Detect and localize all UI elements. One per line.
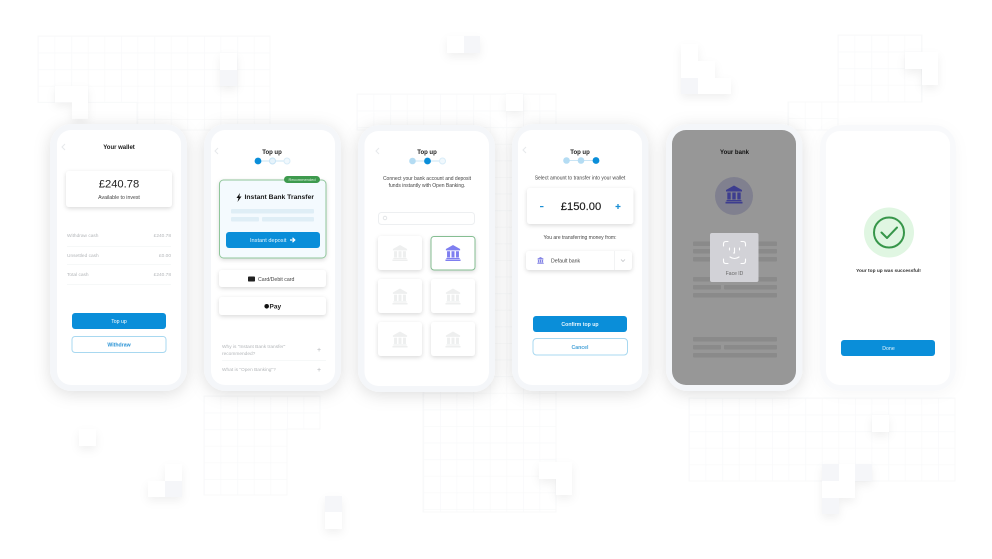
stepper — [255, 158, 290, 164]
bank tile 2 selected — [431, 236, 475, 270]
floating blocks: top left L — [55, 86, 88, 119]
floating blocks: top stairs — [681, 44, 731, 94]
plus control — [616, 204, 620, 209]
done button: Done — [882, 346, 895, 352]
phone screen — [211, 130, 335, 385]
face id icon — [724, 242, 746, 264]
phone frame — [204, 124, 341, 391]
floating block: lower right single — [872, 415, 889, 432]
lightning icon — [236, 193, 242, 202]
phone 6: success — [820, 125, 956, 391]
phone frame — [820, 125, 956, 391]
floating blocks: upper column — [220, 53, 237, 86]
success icon — [864, 208, 914, 258]
balance card — [66, 171, 172, 207]
source label: You are transferring money from: — [544, 235, 616, 241]
phone frame — [512, 124, 648, 391]
screen title: Your wallet — [103, 145, 135, 151]
intro text — [383, 176, 472, 189]
placeholder text bars — [693, 242, 777, 358]
background grid: below second phone — [204, 396, 320, 495]
balance amount: £240.78 — [99, 178, 139, 190]
floating blocks: lower right cluster — [822, 464, 872, 514]
phone screen — [826, 131, 950, 385]
withdraw button — [72, 336, 166, 352]
amount card — [527, 188, 634, 224]
screen title: Top up — [570, 150, 590, 156]
cash rows: £240.78 — [154, 233, 171, 239]
faq list: recommended? — [222, 351, 256, 357]
top up button — [72, 313, 166, 329]
faq list: What is "Open Banking"? — [222, 367, 276, 373]
cancel button — [533, 338, 628, 355]
apple pay option: Pay — [270, 304, 281, 310]
withdraw button: Withdraw — [107, 342, 132, 348]
screen title: Top up — [417, 150, 437, 156]
phone 3: select bank — [358, 125, 495, 392]
dimmed screen — [672, 130, 796, 385]
instant deposit button: Instant deposit — [250, 238, 287, 244]
phone screen — [518, 130, 642, 385]
phone 5: bank face id — [666, 124, 802, 391]
bank tile 5 — [378, 322, 422, 356]
phone 2: top up method — [204, 124, 341, 391]
placeholder text bars — [231, 209, 314, 222]
recommended badge: Recommended — [288, 177, 316, 182]
bank tile 1 — [378, 236, 422, 270]
confirm button: Confirm top up — [561, 322, 599, 328]
phone screen — [364, 131, 489, 386]
stepper — [409, 158, 446, 164]
instant bank transfer card — [220, 176, 326, 258]
bank tile 6 — [431, 322, 475, 356]
background grid: top left — [38, 36, 270, 130]
cash rows: £240.78 — [154, 272, 171, 278]
cash rows: £0.00 — [159, 253, 171, 259]
instruction text: Select amount to transfer into your wallet — [535, 176, 626, 182]
bank dropdown — [526, 251, 632, 270]
top up button: Top up — [111, 319, 127, 325]
face id dialog — [710, 233, 758, 282]
back arrow — [523, 147, 526, 153]
faq list: + — [317, 347, 321, 354]
background grid: upper right — [788, 35, 922, 130]
screen title: Your bank — [720, 150, 750, 156]
back arrow — [215, 148, 218, 154]
done button — [841, 340, 935, 356]
floating blocks: top right — [905, 52, 938, 85]
cash rows: Unsettled cash — [67, 253, 99, 259]
faq list — [222, 344, 326, 374]
phone frame — [50, 124, 187, 391]
phone frame — [358, 125, 495, 392]
floating block: lower left single — [79, 429, 96, 446]
faq list: Why is "Instant Bank transfer" — [222, 344, 286, 350]
floating blocks: top centre pair — [447, 36, 480, 53]
card debit option: Card/Debit card — [258, 277, 294, 283]
confirm button — [533, 316, 627, 332]
success message: Your top up was successful! — [856, 268, 921, 274]
amount: £150.00 — [561, 201, 601, 213]
balance label: Available to invest — [98, 195, 140, 201]
card debit option — [219, 270, 326, 287]
search box — [378, 212, 474, 224]
back arrow — [62, 144, 65, 150]
apple pay option — [219, 297, 326, 315]
cash rows: Withdraw cash — [67, 233, 99, 239]
minus control — [540, 206, 544, 207]
cash rows — [67, 233, 171, 285]
bank tile 4 — [431, 279, 475, 313]
bank dropdown: Default bank — [551, 258, 581, 264]
card heading: Instant Bank Transfer — [244, 194, 314, 201]
intro text: Connect your bank account and deposit — [383, 176, 472, 182]
cash rows: Total cash — [67, 272, 89, 278]
background grid: centre — [357, 94, 556, 512]
intro text: funds instantly with Open Banking. — [389, 183, 465, 189]
floating blocks: bottom centre L — [539, 462, 572, 495]
face id label: Face ID — [726, 271, 744, 277]
floating blocks: bottom column — [325, 496, 342, 529]
bank logo — [715, 177, 753, 215]
phone 4: select amount — [512, 124, 648, 391]
cancel button: Cancel — [571, 345, 589, 351]
stepper — [563, 157, 599, 164]
phone frame — [666, 124, 802, 391]
bank tile 3 — [378, 279, 422, 313]
background grid: lower right — [689, 398, 955, 481]
floating blocks: lower left cluster — [148, 464, 182, 497]
screen title: Top up — [262, 150, 282, 156]
phone screen — [57, 130, 181, 385]
faq list: + — [317, 367, 321, 374]
floating block: centre single — [506, 94, 523, 111]
back arrow — [376, 148, 379, 154]
phone 1: your wallet — [50, 124, 187, 391]
